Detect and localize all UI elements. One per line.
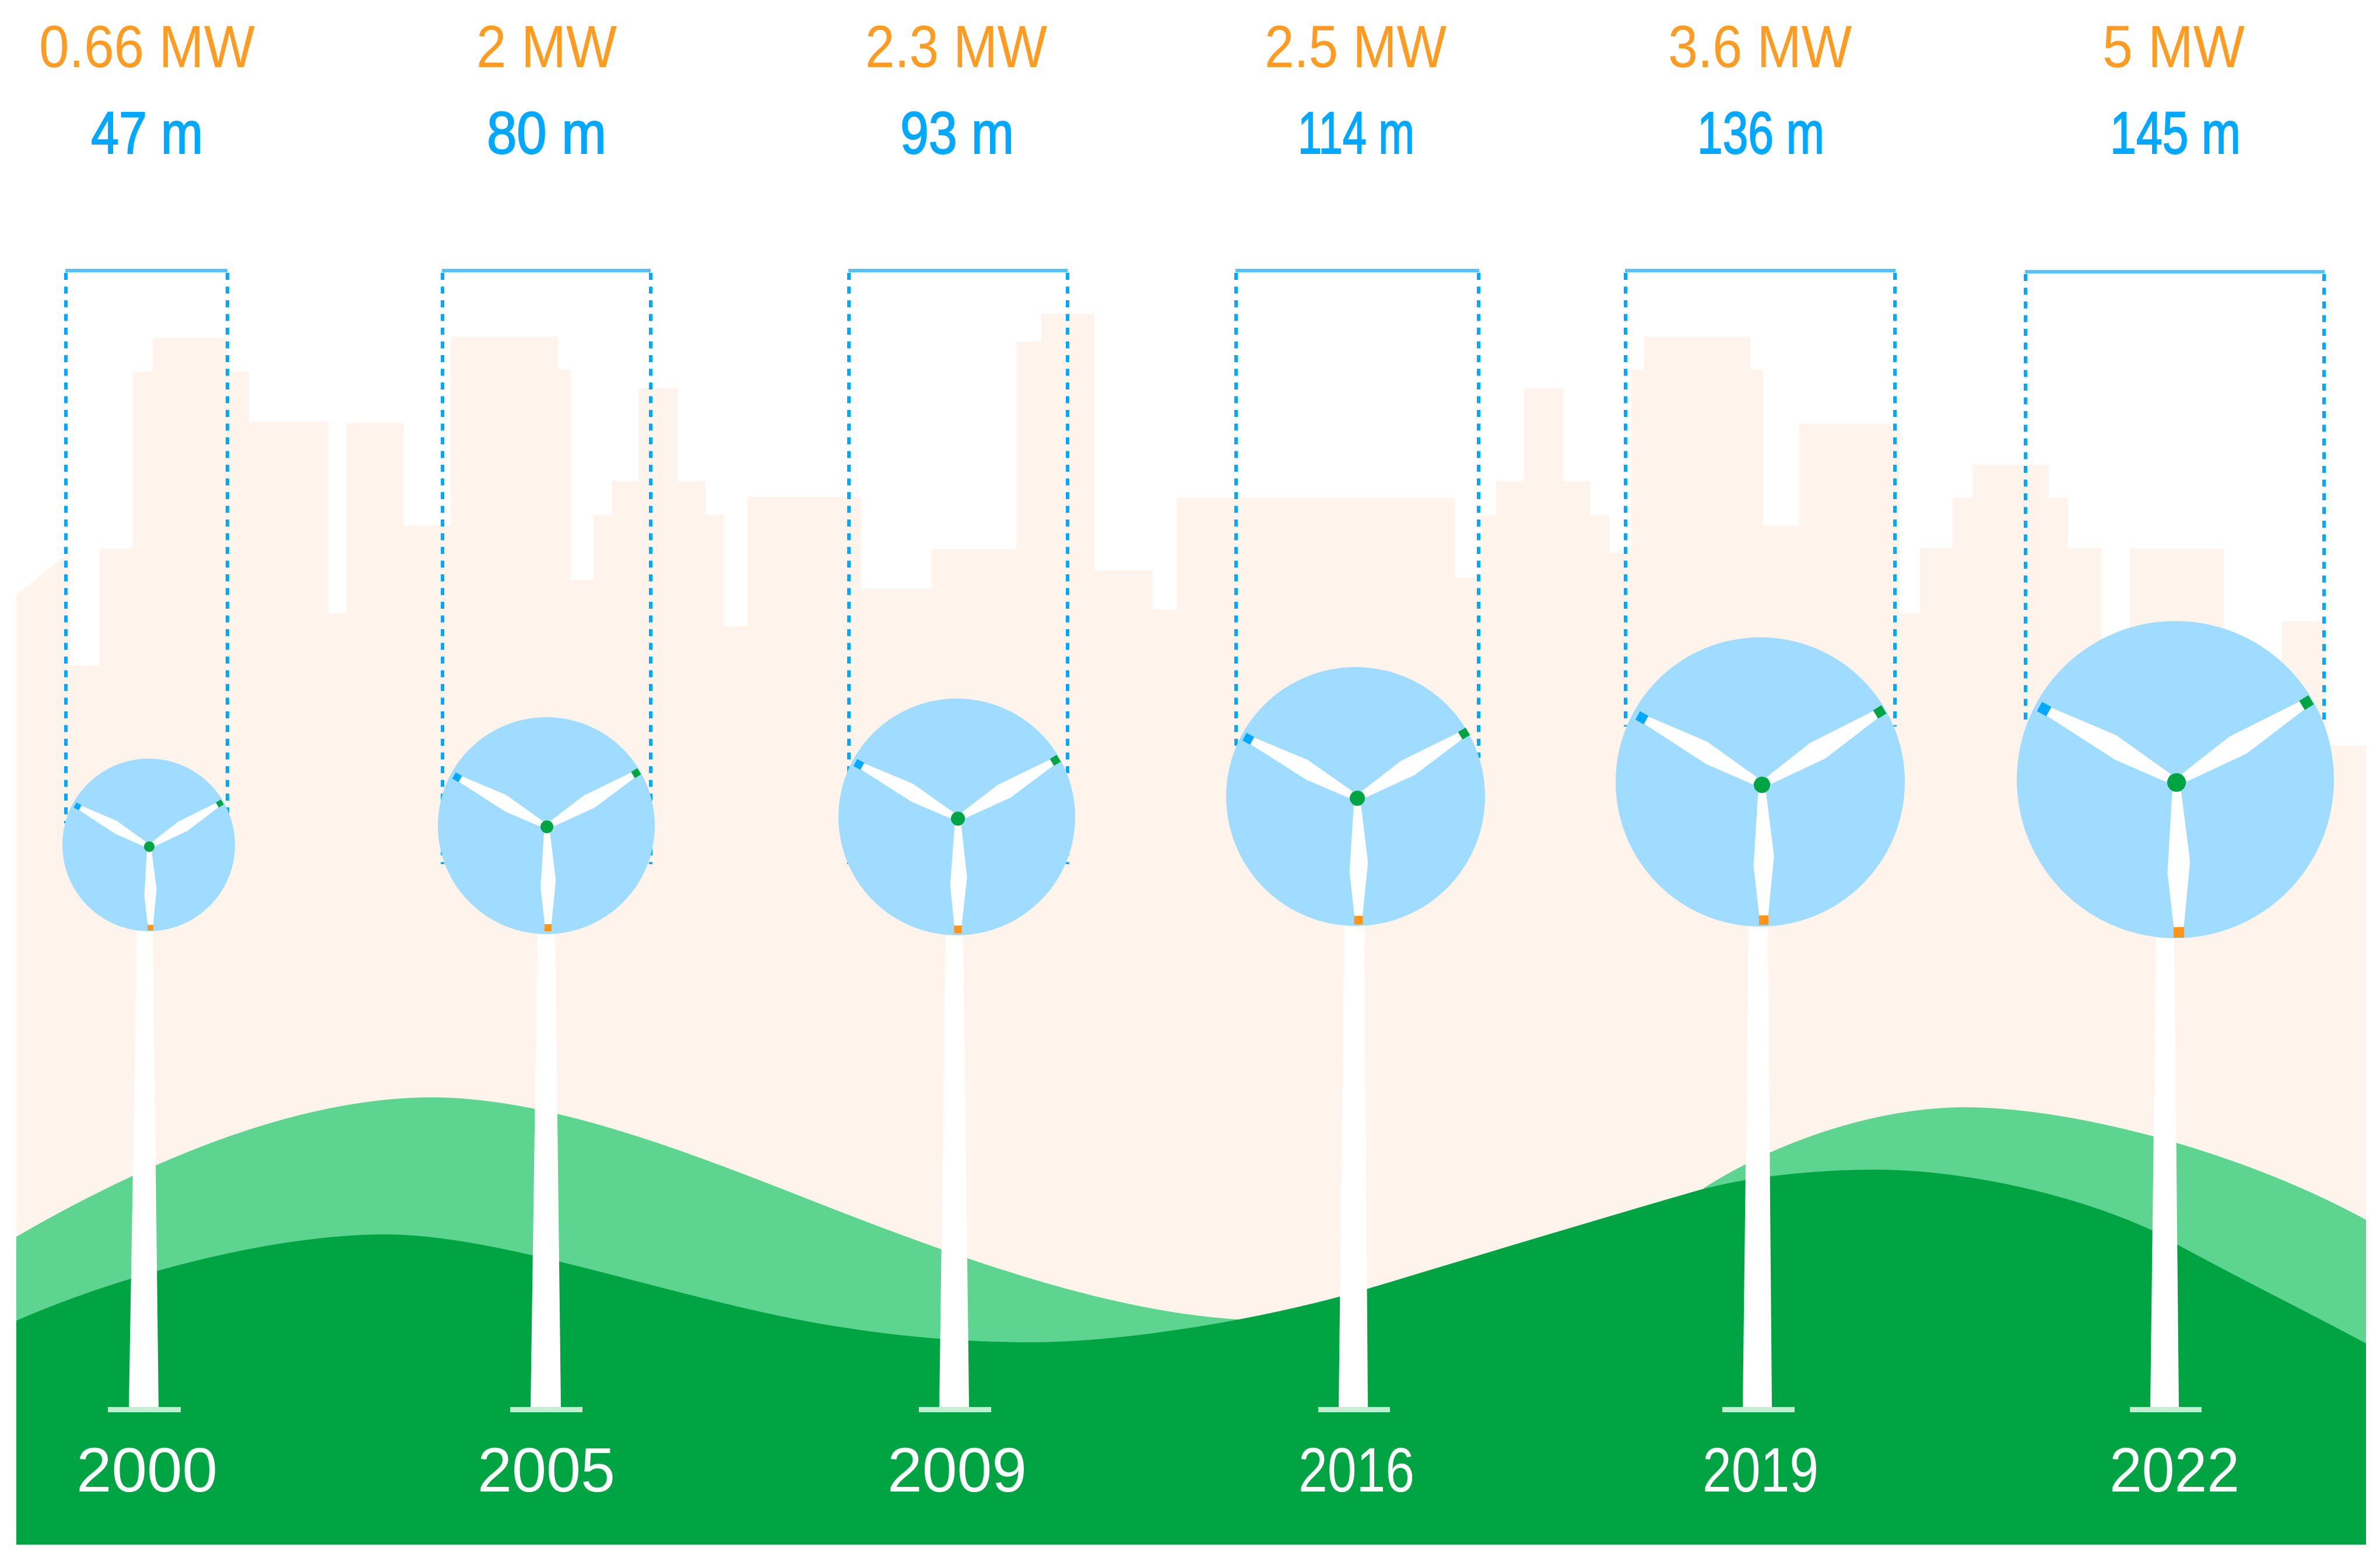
- rotor disc 2000: [62, 759, 235, 931]
- turbine 2016: [1226, 13, 1485, 1505]
- diameter bracket 2000: [65, 269, 227, 823]
- blades 2016: [1242, 728, 1470, 924]
- rated power 2009: 2.3 MW: [865, 13, 1047, 80]
- hub 2016: [1350, 791, 1365, 806]
- year 2016: 2016: [1298, 1434, 1414, 1505]
- rotor diameter 2009: 93 m: [900, 100, 1014, 166]
- rotor disc 2022: [2017, 621, 2334, 938]
- rotor diameter 2005: 80 m: [487, 100, 606, 166]
- rotor diameter 2019: 136 m: [1697, 100, 1824, 166]
- diameter bracket 2019: [1625, 269, 1895, 727]
- turbine 2009: [838, 13, 1075, 1505]
- rated power 2022: 5 MW: [2102, 13, 2245, 80]
- hub 2009: [951, 812, 965, 826]
- hub 2005: [540, 820, 553, 833]
- year 2009: 2009: [887, 1434, 1027, 1505]
- tower 2022: [2130, 933, 2202, 1412]
- hub 2022: [2167, 773, 2186, 792]
- tower 2000: [108, 927, 181, 1412]
- back hill: light green: [16, 1097, 2366, 1545]
- blades 2000: [73, 799, 224, 931]
- blades 2009: [854, 755, 1061, 934]
- year 2000: 2000: [76, 1434, 217, 1505]
- hub 2000: [144, 841, 155, 852]
- year 2022: 2022: [2109, 1434, 2239, 1505]
- blades 2005: [452, 768, 641, 931]
- tower 2016: [1318, 918, 1390, 1412]
- rotor disc 2019: [1616, 637, 1905, 927]
- rated power 2000: 0.66 MW: [39, 13, 255, 80]
- tower 2019: [1722, 927, 1795, 1412]
- blades 2022: [2037, 695, 2314, 938]
- rated power 2005: 2 MW: [476, 13, 617, 80]
- rotor disc 2005: [438, 717, 655, 934]
- year 2005: 2005: [478, 1434, 615, 1505]
- diameter bracket 2009: [848, 269, 1068, 864]
- turbine 2000: [39, 13, 255, 1505]
- rated power 2016: 2.5 MW: [1265, 13, 1447, 80]
- diameter bracket 2022: [2025, 270, 2325, 725]
- tower 2009: [919, 927, 991, 1412]
- turbine 2005: [438, 13, 655, 1505]
- city skyline background: [16, 314, 2366, 1545]
- diameter bracket 2005: [442, 269, 651, 864]
- tower 2005: [510, 927, 582, 1412]
- turbine 2022: [2017, 13, 2334, 1505]
- front hill: dark green: [16, 1170, 2366, 1545]
- turbine 2019: [1616, 13, 1905, 1505]
- rotor diameter 2016: 114 m: [1298, 100, 1414, 166]
- blades 2019: [1635, 706, 1886, 925]
- rated power 2019: 3.6 MW: [1668, 13, 1852, 80]
- rotor disc 2009: [838, 699, 1075, 935]
- diameter bracket 2016: [1235, 269, 1479, 758]
- year 2019: 2019: [1702, 1434, 1819, 1505]
- hub 2019: [1754, 777, 1770, 793]
- rotor diameter 2022: 145 m: [2110, 100, 2241, 166]
- rotor disc 2016: [1226, 667, 1485, 926]
- rotor diameter 2000: 47 m: [91, 100, 203, 166]
